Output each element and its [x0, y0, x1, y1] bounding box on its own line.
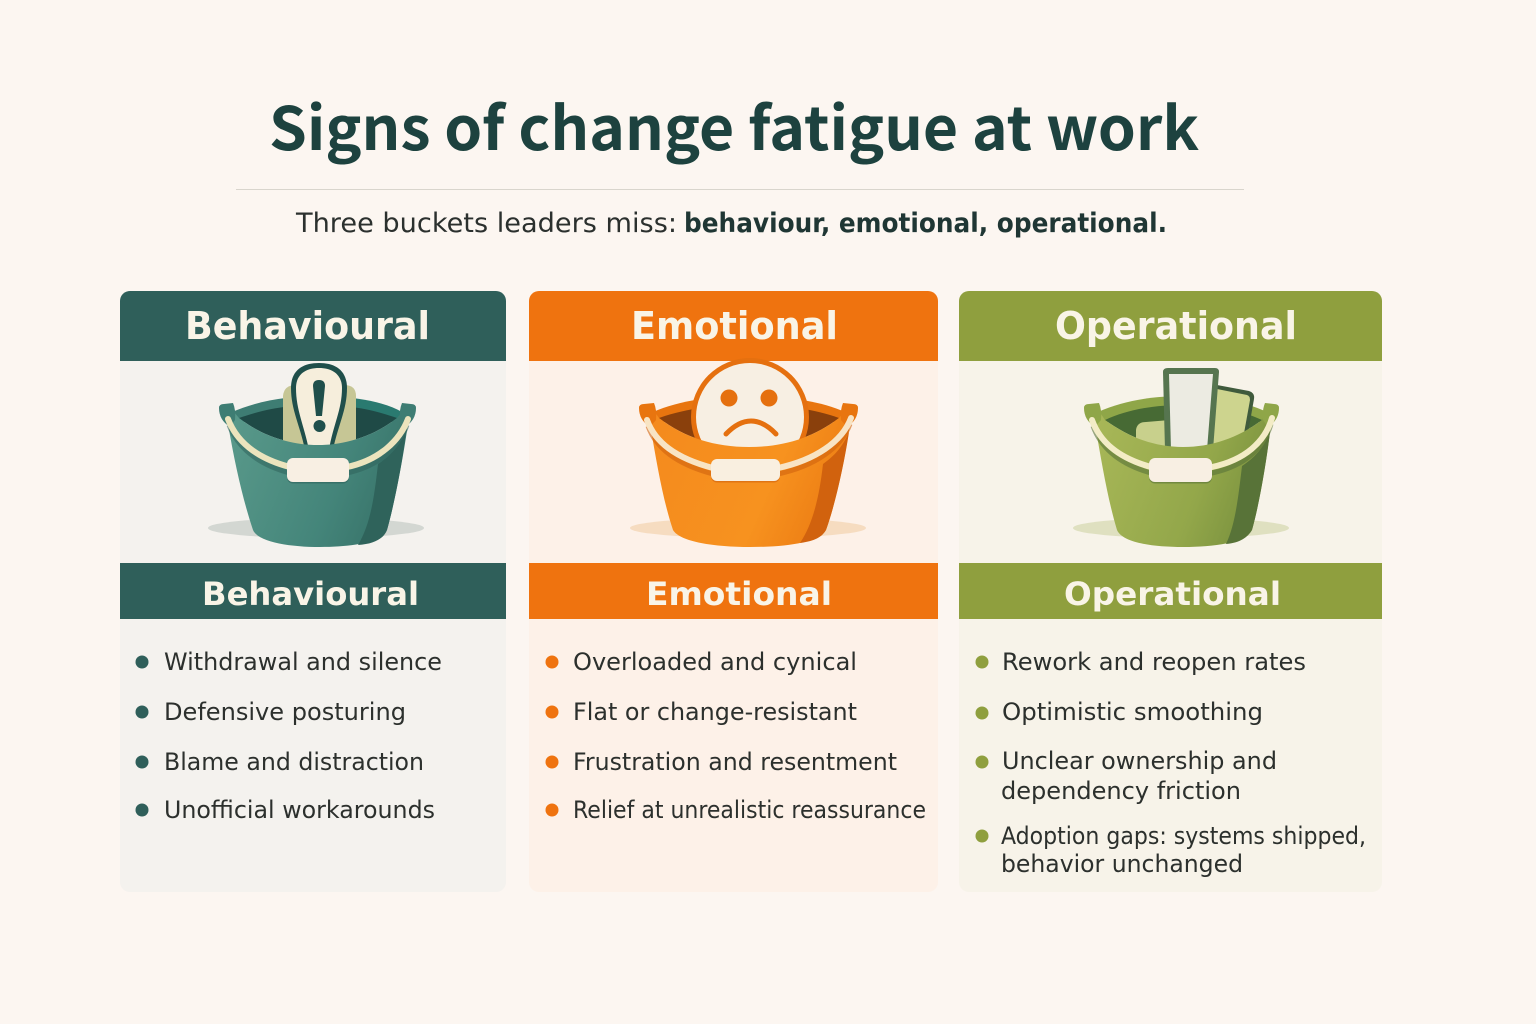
list: behavioural signs: Unofficial workarounds	[164, 796, 435, 824]
subtitle	[295, 208, 1167, 239]
list: operational signs: Unclear ownership and	[1002, 747, 1277, 775]
panel: operational	[959, 291, 1382, 892]
header: behavioural: Behavioural	[185, 304, 430, 348]
list: operational signs: Adoption gaps: systems shipped,	[1001, 822, 1366, 850]
list: emotional signs: Relief at unrealistic reassurance	[573, 796, 926, 824]
header: operational: Operational	[1055, 304, 1297, 348]
header: operational	[959, 291, 1382, 361]
list: emotional signs	[546, 648, 926, 824]
list: behavioural signs: Defensive posturing	[164, 698, 406, 726]
list: operational signs: Optimistic smoothing	[1002, 698, 1263, 726]
header: behavioural	[120, 291, 506, 361]
list: behavioural signs: Withdrawal and silence	[164, 648, 442, 676]
header: emotional: Emotional	[631, 304, 838, 348]
list: operational signs: behavior unchanged	[1001, 850, 1243, 878]
subheader: emotional: Emotional	[646, 575, 832, 613]
subheader: behavioural: Behavioural	[202, 575, 419, 613]
icon: orange bucket with sad face	[630, 358, 866, 547]
list: emotional signs: Frustration and resentment	[573, 748, 897, 776]
icon: teal bucket with exclamation	[208, 363, 424, 547]
list: behavioural signs	[136, 648, 442, 824]
list: emotional signs: Flat or change-resistant	[573, 698, 857, 726]
list: operational signs	[976, 648, 1366, 878]
subheader: operational: Operational	[1064, 575, 1281, 613]
subheader: operational	[959, 563, 1382, 619]
panel: behavioural	[120, 291, 506, 818]
list: operational signs: Rework and reopen rates	[1002, 648, 1306, 676]
subtitle: Three buckets leaders miss:	[295, 208, 677, 239]
subheader: emotional	[529, 563, 938, 619]
subheader: behavioural	[120, 563, 506, 619]
list: operational signs: dependency friction	[1001, 777, 1241, 805]
list: behavioural signs: Blame and distraction	[164, 748, 424, 776]
header: emotional	[529, 291, 938, 361]
subtitle: behaviour, emotional, operational.	[684, 208, 1167, 239]
list: emotional signs: Overloaded and cynical	[573, 648, 857, 676]
panel: emotional	[529, 291, 938, 892]
title: Signs of change fatigue at work	[269, 81, 1199, 168]
icon: green bucket with documents	[1073, 368, 1289, 547]
